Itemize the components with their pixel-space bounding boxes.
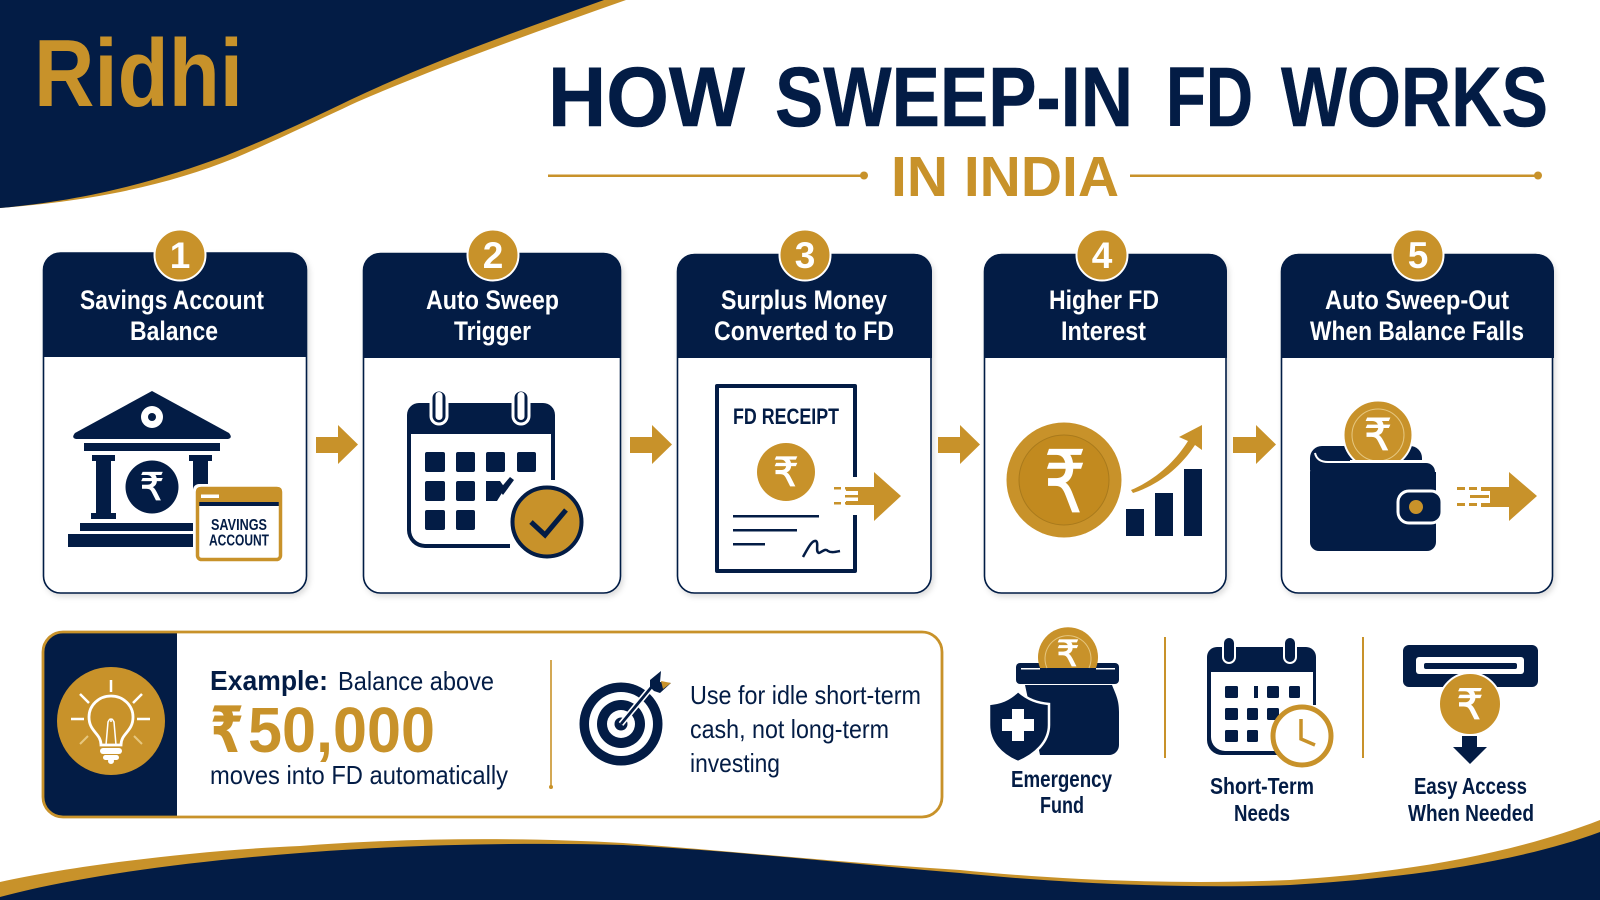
panel: example and usage tip (43, 632, 942, 817)
icon: rupee coin and growth bars (1006, 422, 1202, 538)
bottom navy wave with gold edge (0, 820, 1600, 900)
icon: bag with coin and shield: ₹ (1057, 633, 1079, 674)
step 2 heading: Trigger (454, 316, 531, 346)
step 1 heading: Savings Account (80, 285, 264, 315)
step 2 number badge: 2 (483, 235, 503, 276)
usage tip text (690, 680, 921, 778)
label: short-term needs: Needs (1234, 800, 1290, 826)
panel: step 3 surplus money converted to FD (677, 230, 932, 593)
example text: moves into FD automatically (210, 760, 508, 790)
step 3 heading: Converted to FD (714, 316, 894, 346)
icon: calendar with clock (1207, 637, 1331, 765)
step 5 number badge (1392, 230, 1444, 280)
arrow: step 2 to 3 (630, 425, 672, 464)
icon: bag with coin and shield (989, 627, 1119, 762)
step 4 heading (1049, 285, 1159, 346)
title: SWEEP-IN (775, 50, 1133, 144)
icon: FD receipt with arrow: FD RECEIPT (733, 404, 839, 429)
use case: emergency fund (989, 627, 1119, 818)
label: emergency fund (1011, 766, 1112, 818)
icon: calendar with check badge (407, 390, 587, 562)
arrow: step 1 to 2 (316, 425, 358, 464)
icon: cash slot with coin and down arrow: ₹ (1457, 681, 1483, 728)
icon: FD receipt with arrow: ₹ (773, 451, 799, 495)
example text: Balance above (338, 666, 494, 696)
step 4 heading: Interest (1061, 316, 1146, 346)
step 2 number badge (468, 230, 518, 280)
step 4 number badge: 4 (1092, 235, 1113, 276)
label: easy access when needed: Easy Access (1414, 773, 1527, 799)
icon: bank with savings account card: SAVINGS (211, 517, 267, 534)
step 1 number badge (154, 230, 206, 280)
step 1 heading: Balance (130, 316, 218, 346)
label: emergency fund: Emergency (1011, 766, 1112, 792)
top-left navy swoosh with gold edge (0, 0, 626, 208)
title: WORKS (1281, 50, 1548, 144)
icon: wallet with coin and arrow: ₹ (1364, 411, 1392, 460)
arrow: step 3 to 4 (938, 425, 980, 464)
step 3 number badge (780, 230, 830, 280)
icon: FD receipt with arrow (717, 386, 901, 571)
title: FD (1166, 50, 1253, 144)
label: short-term needs (1210, 773, 1314, 826)
example text (210, 665, 508, 790)
example text: ₹ (210, 694, 244, 766)
icon: target with dart (580, 671, 671, 766)
step 5 heading (1310, 285, 1524, 346)
icon: rupee coin and growth bars: ₹ (1044, 435, 1086, 531)
step 2 heading (426, 285, 559, 346)
usage tip text: investing (690, 748, 780, 778)
step 5 heading: When Balance Falls (1310, 316, 1524, 346)
icon: bank with savings account card (68, 391, 285, 564)
arrow: step 4 to 5 (1233, 425, 1276, 464)
example text: Example: (210, 665, 328, 696)
label: easy access when needed (1408, 773, 1534, 826)
panel: step 2 auto sweep trigger (363, 230, 621, 593)
use case: easy access when needed (1403, 645, 1538, 826)
usage tip text: cash, not long-term (690, 714, 889, 744)
logo: Ridhi: Ridhi (34, 20, 243, 127)
step 5 number badge: 5 (1408, 235, 1428, 276)
title (548, 50, 1548, 144)
subtitle with gold rules: IN INDIA (891, 145, 1119, 209)
icon: bank with savings account card: ₹ (140, 467, 164, 509)
title: HOW (548, 50, 746, 144)
step 4 number badge (1076, 230, 1128, 280)
usage tip text: Use for idle short-term (690, 680, 921, 710)
label: short-term needs: Short-Term (1210, 773, 1314, 799)
step 1 heading (80, 285, 264, 346)
icon: wallet with coin and arrow (1310, 400, 1537, 551)
icon: cash slot with coin and down arrow (1403, 645, 1538, 764)
example text: 50,000 (248, 694, 435, 766)
panel: step 1 savings account balance (43, 230, 307, 593)
step 4 heading: Higher FD (1049, 285, 1159, 315)
panel: step 5 auto sweep-out (1281, 230, 1554, 593)
icon: bank with savings account card: ACCOUNT (209, 532, 269, 550)
step 2 heading: Auto Sweep (426, 285, 559, 315)
step 3 heading: Surplus Money (721, 285, 887, 315)
step 3 number badge: 3 (795, 235, 815, 276)
panel: step 4 higher FD interest (984, 230, 1227, 593)
step 1 number badge: 1 (170, 235, 190, 276)
use case: short-term needs (1207, 637, 1331, 826)
icon: lightbulb (57, 667, 165, 775)
step 5 heading: Auto Sweep-Out (1325, 285, 1509, 315)
label: easy access when needed: When Needed (1408, 800, 1534, 826)
label: emergency fund: Fund (1040, 792, 1084, 818)
subtitle with gold rules (548, 145, 1542, 209)
step 3 heading (714, 285, 894, 346)
